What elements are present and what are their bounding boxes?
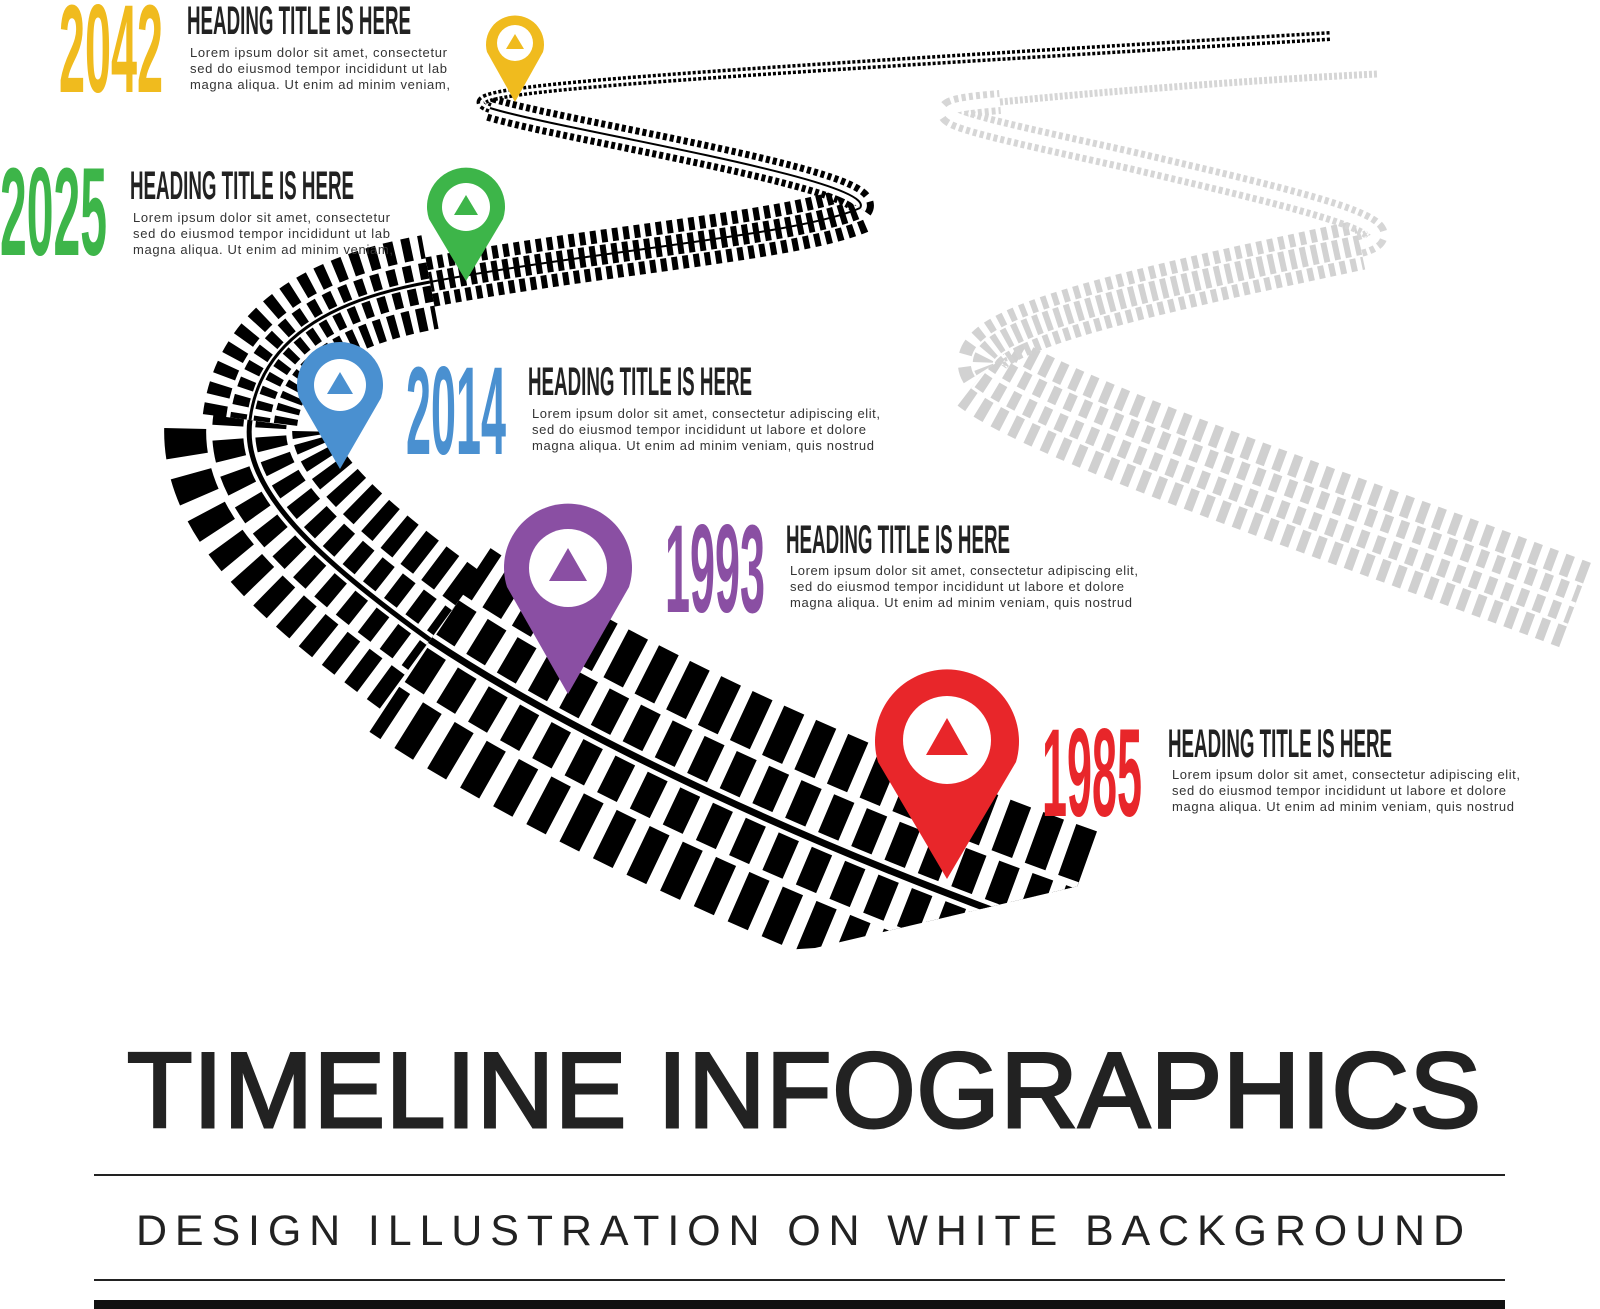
milestone 2025: HEADING TITLE IS HERE bbox=[130, 164, 354, 208]
pin: green 2025 bbox=[427, 168, 505, 281]
milestone 1993: sed do eiusmod tempor incididunt ut labore et dolore bbox=[790, 579, 1124, 594]
milestone 2042: sed do eiusmod tempor incididunt ut lab bbox=[190, 61, 447, 76]
milestone 2014: Lorem ipsum dolor sit amet, consectetur adipiscing elit, bbox=[532, 406, 880, 421]
main black tire track bbox=[249, 36, 1330, 935]
subtitle: DESIGN ILLUSTRATION ON WHITE BACKGROUND bbox=[136, 1207, 1464, 1255]
milestone 1993: Lorem ipsum dolor sit amet, consectetur adipiscing elit, bbox=[790, 563, 1138, 578]
milestone 1985: sed do eiusmod tempor incididunt ut labore et dolore bbox=[1172, 783, 1506, 798]
milestone 2042: HEADING TITLE IS HERE bbox=[187, 0, 411, 43]
milestone 2014: 2014 bbox=[406, 342, 506, 481]
pin: yellow 2042 bbox=[486, 15, 544, 102]
milestone 2014: HEADING TITLE IS HERE bbox=[528, 360, 752, 404]
milestone 2025: sed do eiusmod tempor incididunt ut lab bbox=[133, 226, 390, 241]
pin: red 1985 bbox=[875, 669, 1019, 879]
milestone 1985: magna aliqua. Ut enim ad minim veniam, quis nostrud bbox=[1172, 799, 1514, 814]
pin: purple 1993 bbox=[504, 504, 632, 694]
milestone 1985: Lorem ipsum dolor sit amet, consectetur adipiscing elit, bbox=[1172, 767, 1520, 782]
milestone 1993 bbox=[665, 500, 1138, 639]
milestone 2025: Lorem ipsum dolor sit amet, consectetur bbox=[133, 210, 391, 225]
pin: blue 2014 bbox=[297, 342, 383, 469]
milestone 2014: magna aliqua. Ut enim ad minim veniam, quis nostrud bbox=[532, 438, 874, 453]
milestone 1985: 1985 bbox=[1042, 704, 1142, 843]
milestone 2014: sed do eiusmod tempor incididunt ut labore et dolore bbox=[532, 422, 866, 437]
milestone 2042: magna aliqua. Ut enim ad minim veniam, bbox=[190, 77, 450, 92]
milestone 1993: 1993 bbox=[665, 500, 765, 639]
milestone 1993: magna aliqua. Ut enim ad minim veniam, quis nostrud bbox=[790, 595, 1132, 610]
milestone 2014 bbox=[406, 342, 880, 481]
title: TIMELINE INFOGRAPHICS bbox=[127, 1030, 1481, 1150]
milestone 2025: 2025 bbox=[0, 143, 107, 282]
milestone 2025: magna aliqua. Ut enim ad minim veniam, bbox=[133, 242, 393, 257]
gray background tire track bbox=[949, 74, 1575, 605]
milestone 1985 bbox=[1042, 704, 1520, 843]
milestone 1993: HEADING TITLE IS HERE bbox=[786, 518, 1010, 562]
milestone 2042: Lorem ipsum dolor sit amet, consectetur bbox=[190, 45, 448, 60]
